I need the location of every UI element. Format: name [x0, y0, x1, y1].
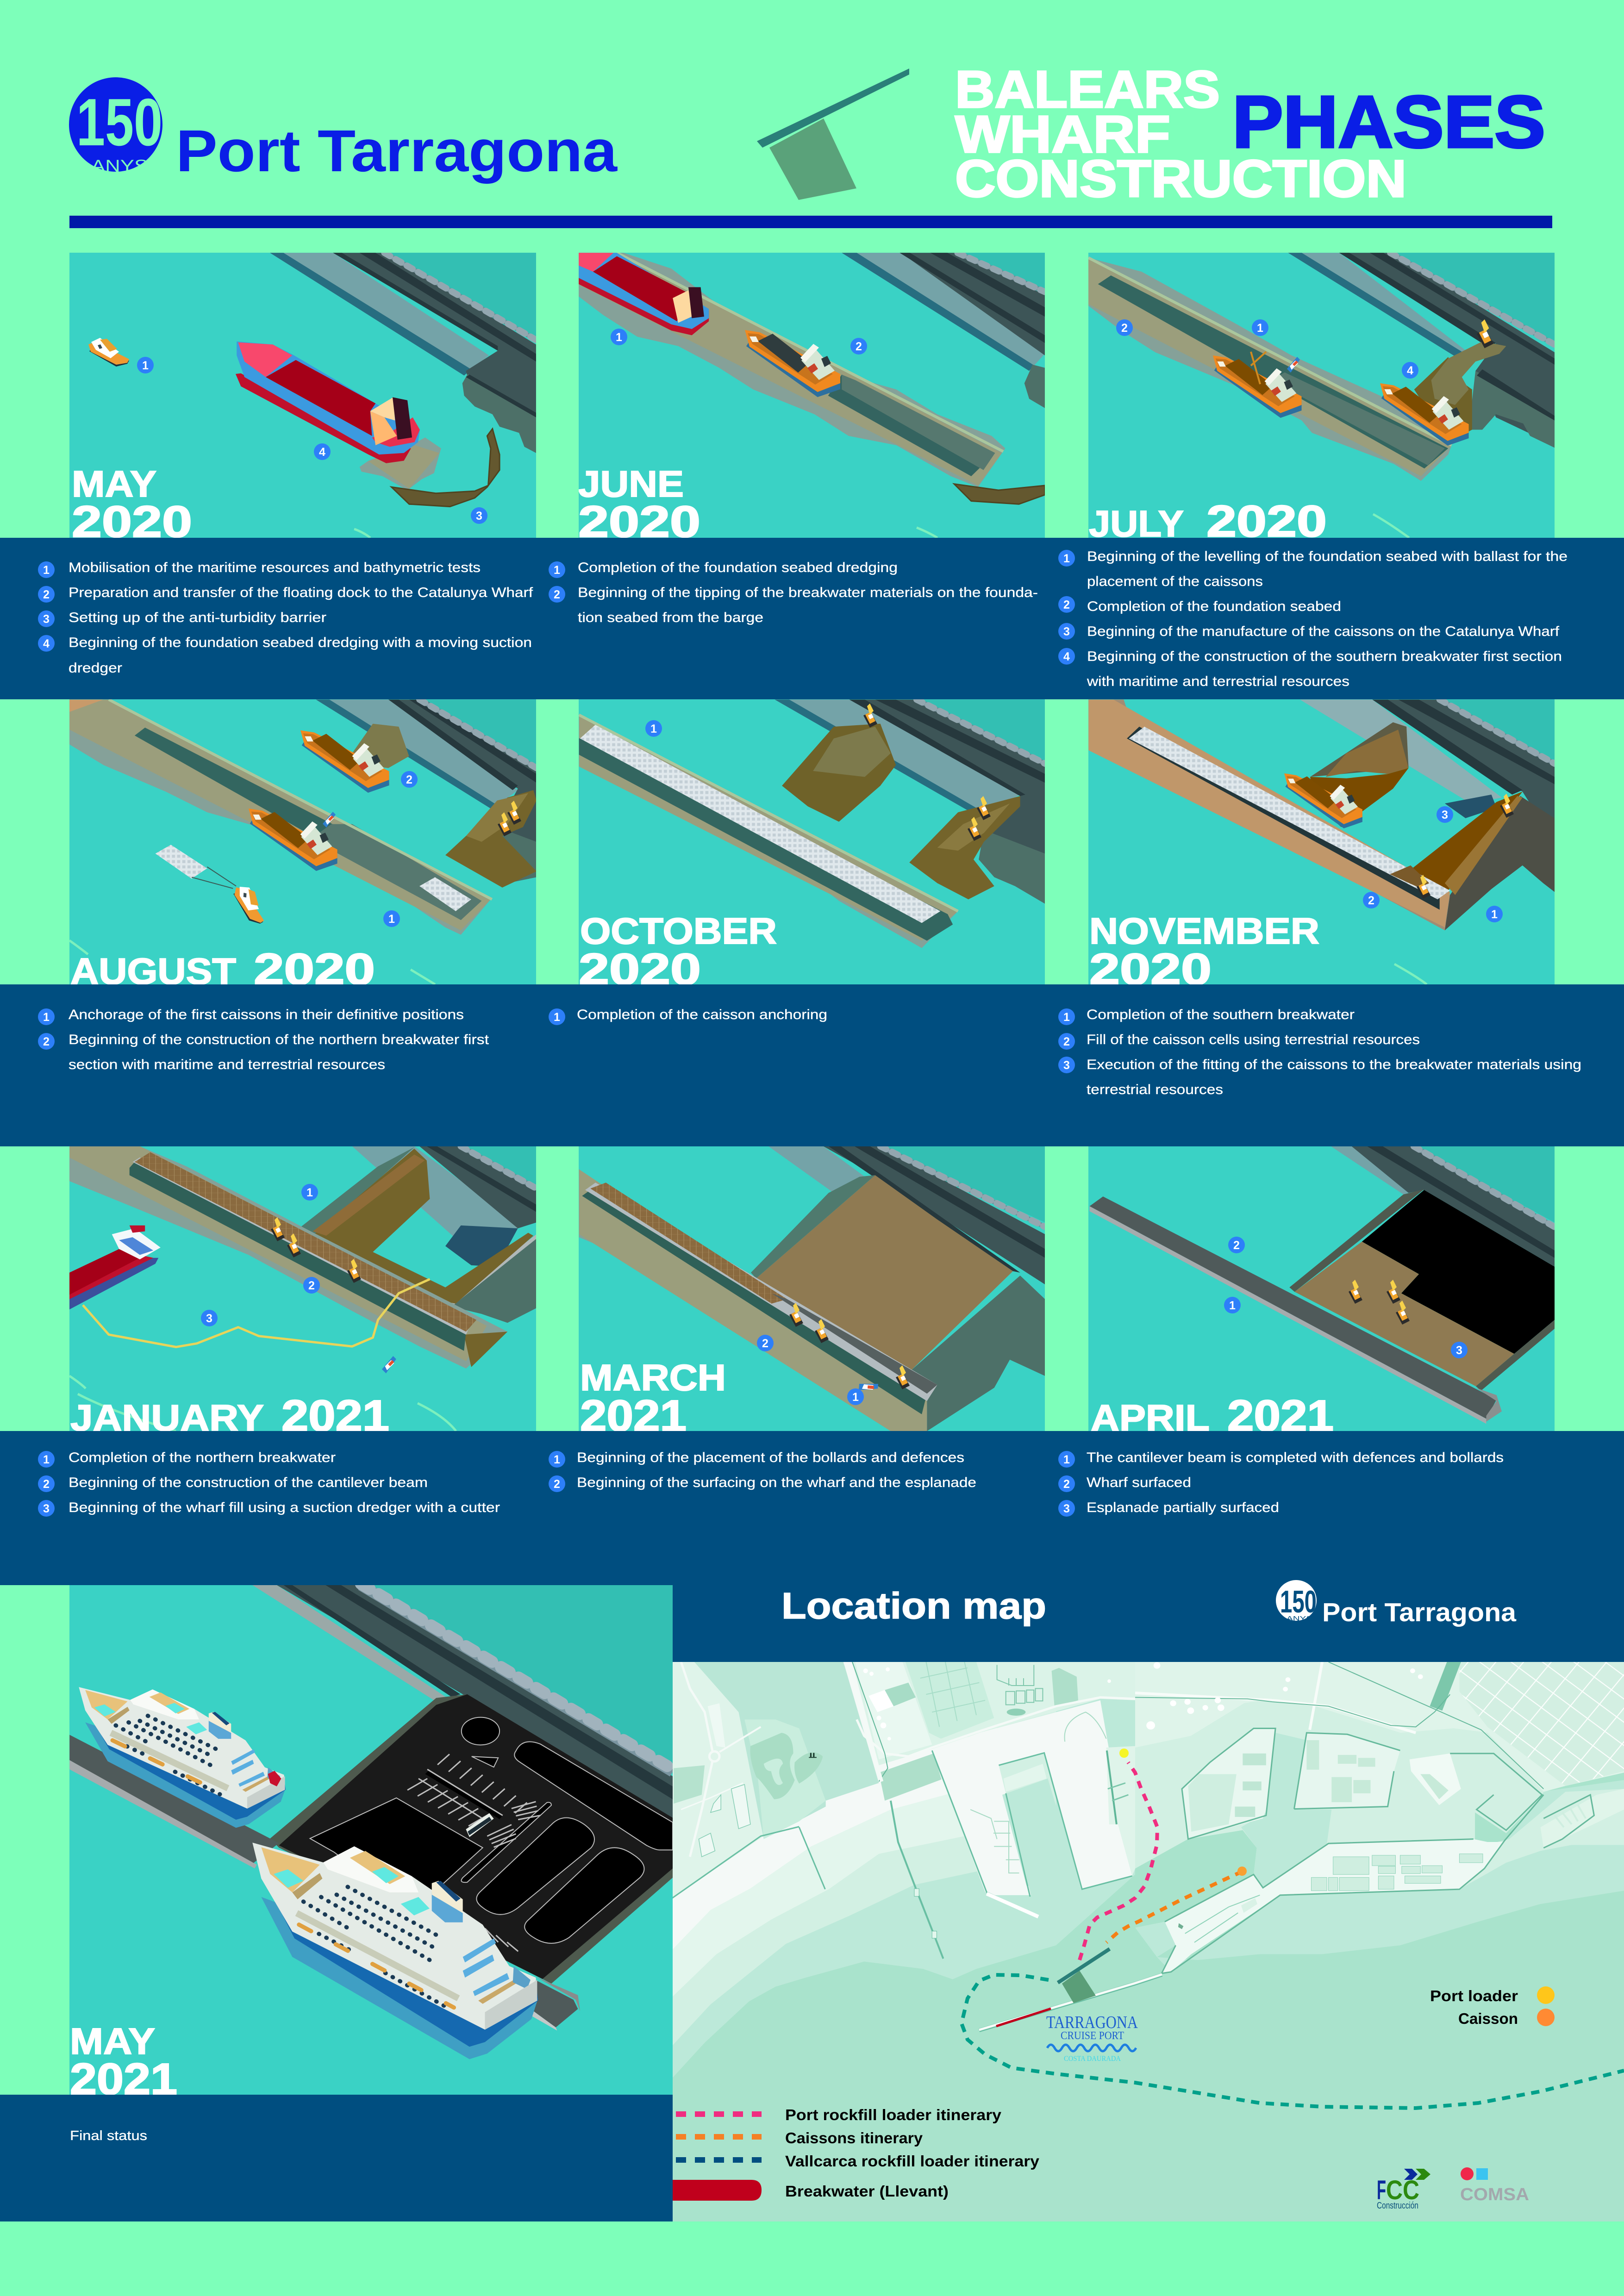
route: caissons	[1106, 1872, 1242, 1942]
marker: port loader point	[1119, 1748, 1129, 1758]
legend pink label: Port rockfill loader itinerary	[785, 2106, 1002, 2123]
June 2020 list	[549, 560, 1038, 625]
May 2020 list	[38, 560, 533, 676]
November 2020 list: Completion of the southern breakwater	[1087, 1007, 1355, 1022]
band: row 3 captions	[0, 1431, 1624, 1585]
month label: AUGUST	[70, 951, 236, 992]
legend navy label: Vallcarca rockfill loader itinerary	[785, 2153, 1040, 2170]
July 2020 list: Completion of the foundation seabed	[1087, 599, 1341, 614]
June 2020 list: 1	[554, 564, 560, 577]
month label	[73, 471, 191, 538]
logo: Tarragona Cruise Port	[1046, 2013, 1138, 2063]
October 2020 list: 1	[554, 1011, 560, 1024]
legend navy	[676, 2157, 762, 2163]
March 2021 list: Beginning of the placement of the bollards and defences	[577, 1450, 964, 1465]
logo: small 150 anys: ANYS	[1287, 1615, 1312, 1623]
excavators	[863, 703, 991, 841]
July 2020 list: 4	[1063, 650, 1070, 663]
month label: 2021	[580, 1391, 687, 1441]
seabed scene	[579, 253, 1045, 504]
foam	[917, 528, 937, 538]
badge 1	[383, 910, 400, 927]
badge 4	[1402, 362, 1418, 379]
seabed scene	[1088, 253, 1555, 481]
badge 1: 1	[852, 1391, 859, 1404]
panel: April 2021	[1088, 1146, 1555, 1441]
panel: July 2020	[1088, 253, 1555, 546]
excavator	[1477, 319, 1493, 348]
July 2020 list: Beginning of the manufacture of the caissons on the Catalunya Wharf	[1087, 624, 1560, 639]
July 2020 list: 3	[1063, 625, 1070, 638]
caisson: Caisson	[1458, 2010, 1518, 2027]
dredger ship	[579, 253, 709, 335]
legend orange	[676, 2134, 762, 2140]
badge 2: 2	[1233, 1239, 1240, 1252]
badge 2	[401, 771, 418, 788]
August 2020 list: Beginning of the construction of the northern breakwater first	[69, 1032, 489, 1047]
badge 3	[1451, 1342, 1468, 1358]
panel: June 2020	[578, 253, 1045, 547]
badge 1	[645, 720, 662, 737]
May 2020 list: Preparation and transfer of the floating dock to the Catalunya Wharf	[69, 585, 533, 600]
badge 3: 3	[1442, 809, 1448, 821]
marker: caisson point	[1237, 1867, 1247, 1876]
small boat	[856, 1375, 881, 1399]
badge 2: 2	[856, 340, 862, 353]
foam	[69, 1376, 456, 1431]
cruise ship: large	[252, 1842, 538, 2059]
badge 1: 1	[616, 331, 622, 344]
badge 1	[1486, 906, 1503, 922]
title: Balears Wharf Construction: CONSTRUCTION	[955, 149, 1406, 208]
badge 4: 4	[319, 446, 325, 459]
seabed scene	[69, 699, 537, 935]
month label: 2020	[578, 497, 700, 547]
barges	[1213, 355, 1469, 446]
badge 1	[611, 329, 627, 345]
July 2020 list: Beginning of the construction of the southern breakwater first section	[1087, 649, 1562, 664]
month label: JANUARY	[70, 1397, 264, 1438]
excavators	[1417, 794, 1514, 899]
port loader dot	[1537, 1986, 1555, 2004]
March 2021 list: 2	[554, 1478, 560, 1491]
November 2020 list: 1	[1063, 1011, 1070, 1024]
vehicles	[1349, 1280, 1410, 1325]
April 2021 list: Wharf surfaced	[1087, 1475, 1191, 1490]
month label: MAY	[72, 463, 156, 504]
badge 3: 3	[1456, 1344, 1462, 1357]
route: Vallcarca rockfill loader	[962, 1975, 1624, 2108]
title: Phases: PHASES	[1232, 81, 1545, 163]
badge 1: 1	[388, 913, 395, 926]
January 2021 list: 2	[43, 1478, 50, 1491]
month label: MARCH	[580, 1357, 726, 1398]
month label: 2020	[1089, 945, 1212, 994]
barges	[249, 730, 389, 871]
April 2021 list	[1058, 1450, 1504, 1517]
June 2020 list: 2	[554, 588, 560, 601]
month label	[580, 1357, 726, 1441]
foam	[1373, 514, 1409, 538]
November 2020 list: Fill of the caisson cells using terrestrial resources	[1087, 1032, 1420, 1047]
panel: March 2021	[579, 1146, 1045, 1441]
badge 2: 2	[406, 773, 412, 786]
April 2021 list: 1	[1063, 1453, 1070, 1466]
August 2020 list	[38, 1007, 489, 1072]
barge	[745, 330, 840, 397]
badge 1: 1	[1491, 908, 1498, 921]
crane	[1251, 352, 1266, 384]
month label	[1089, 497, 1327, 546]
November 2020 list: Execution of the fitting of the caissons to the breakwater materials using	[1087, 1057, 1581, 1072]
seabed scene	[579, 699, 1045, 948]
logo: Tarragona Cruise Port: CRUISE PORT	[1061, 2030, 1124, 2042]
July 2020 list: placement of the caissons	[1087, 574, 1263, 589]
month label: 2020	[72, 497, 192, 547]
January 2021 list: Completion of the northern breakwater	[69, 1450, 336, 1465]
logo: Tarragona Cruise Port: COSTA DAURADA	[1064, 2055, 1121, 2063]
badge 2	[850, 338, 867, 355]
badge 2: 2	[762, 1337, 768, 1350]
July 2020 list: 1	[1063, 552, 1070, 565]
month label: 2021	[1227, 1391, 1334, 1441]
title: Balears Wharf Construction: WHARF	[955, 105, 1170, 163]
small boat	[382, 1356, 396, 1373]
small boat	[1287, 357, 1300, 373]
icon: wharf plan	[757, 68, 909, 200]
badge 2	[1116, 319, 1133, 336]
badge 3: 3	[476, 510, 482, 523]
October 2020 list: Completion of the caisson anchoring	[577, 1007, 827, 1022]
cantilever beam	[69, 1735, 580, 2031]
legend breakwater label: Breakwater (Llevant)	[785, 2183, 949, 2200]
badge 2: 2	[1121, 322, 1128, 335]
July 2020 list: Beginning of the levelling of the foundation seabed with ballast for the	[1087, 549, 1568, 564]
logo: small 150 anys: 150	[1280, 1584, 1317, 1619]
caisson dot	[1537, 2009, 1555, 2026]
month label: JULY	[1089, 503, 1184, 544]
April 2021 list: 2	[1063, 1478, 1070, 1491]
panel: May 2020	[69, 253, 536, 547]
excavators	[498, 801, 521, 836]
badge 1: 1	[650, 722, 657, 735]
final status text: Final status	[70, 2128, 147, 2143]
band: final status	[0, 2095, 673, 2221]
badge 2	[1228, 1237, 1245, 1253]
esplanade scene	[1090, 1146, 1555, 1424]
May 2020 list: 3	[43, 613, 50, 626]
month label: 2021	[281, 1391, 389, 1441]
badge 3: 3	[206, 1312, 212, 1325]
legend: routes	[673, 2106, 1040, 2201]
month label	[70, 2021, 177, 2104]
May 2020 list: Beginning of the foundation seabed dredging with a moving suction	[69, 635, 532, 650]
logo: FCC Construccion: Construcción	[1377, 2201, 1418, 2211]
badge 2: 2	[1368, 894, 1374, 907]
month label	[578, 463, 700, 547]
July 2020 list: 2	[1063, 598, 1070, 611]
location map	[672, 1662, 1624, 2221]
foam	[354, 529, 370, 538]
flag	[268, 1771, 281, 1786]
January 2021 list: 3	[43, 1502, 50, 1515]
logo: FCC Construccion: F	[1377, 2175, 1386, 2205]
dredger ship	[236, 342, 420, 463]
logo: COMSA	[1460, 2167, 1529, 2204]
breakwater strip	[979, 1974, 1162, 2030]
legend breakwater	[673, 2180, 762, 2201]
badge 4: 4	[1407, 364, 1413, 377]
November 2020 list: 3	[1063, 1059, 1070, 1072]
badge 2	[1363, 892, 1380, 908]
badge 2	[757, 1335, 774, 1351]
foam	[411, 970, 435, 984]
tug	[225, 882, 275, 927]
foam	[1394, 964, 1427, 984]
badge 3	[1437, 806, 1453, 823]
month label	[70, 945, 375, 994]
August 2020 list: section with maritime and terrestrial resources	[69, 1057, 385, 1072]
location map header	[673, 1580, 1624, 1662]
May 2020 list: Setting up of the anti-turbidity barrier	[69, 610, 326, 625]
seabed scene	[579, 1146, 1045, 1431]
April 2021 list: Esplanade partially surfaced	[1087, 1500, 1279, 1515]
logo: Tarragona Cruise Port: TARRAGONA	[1046, 2013, 1138, 2032]
November 2020 list: terrestrial resources	[1087, 1082, 1223, 1097]
badge 1	[137, 357, 154, 373]
badge 1: 1	[1257, 322, 1263, 335]
June 2020 list: Beginning of the tipping of the breakwater materials on the founda-	[578, 585, 1038, 600]
logo: COMSA: COMSA	[1460, 2185, 1529, 2204]
turbidity pipe	[83, 1279, 430, 1347]
badge 1: 1	[306, 1186, 313, 1199]
header brand: Port Tarragona: Port Tarragona	[176, 118, 618, 184]
cargo ship	[69, 1226, 161, 1309]
tug	[88, 338, 129, 367]
legend pink	[676, 2111, 762, 2117]
August 2020 list: Anchorage of the first caissons in their definitive positions	[69, 1007, 464, 1022]
October 2020 list	[549, 1007, 827, 1025]
seabed scene	[270, 253, 536, 507]
legend: points	[1430, 1986, 1555, 2027]
legend orange label: Caissons itinerary	[785, 2129, 923, 2147]
January 2021 list: Beginning of the wharf fill using a suction dredger with a cutter	[69, 1500, 500, 1515]
June 2020 list: tion seabed from the barge	[578, 610, 763, 625]
March 2021 list: 1	[554, 1453, 560, 1466]
August 2020 list: 2	[43, 1035, 50, 1048]
seabed scene	[69, 1146, 537, 1369]
badge 1	[301, 1184, 318, 1201]
vehicles	[789, 1303, 910, 1389]
month label: APRIL	[1091, 1397, 1210, 1438]
title: Balears Wharf Construction: BALEARS	[955, 60, 1220, 118]
panel: January 2021	[69, 1146, 537, 1441]
panel: August 2020	[69, 699, 537, 994]
east sector	[1135, 1662, 1624, 1973]
vehicles	[271, 1217, 361, 1283]
badge 2	[303, 1277, 320, 1294]
logo: FCC Construccion: CC	[1386, 2175, 1419, 2205]
bus	[466, 1813, 494, 1837]
panel: October 2020	[579, 699, 1045, 994]
May 2020 list: 1	[43, 564, 50, 577]
May 2020 list: 4	[43, 637, 50, 650]
June 2020 list: Completion of the foundation seabed dredging	[578, 560, 898, 575]
seabed scene	[1088, 699, 1555, 930]
month label	[1091, 1391, 1334, 1441]
logo: FCC Construccion	[1377, 2169, 1430, 2211]
badge 1	[1224, 1297, 1241, 1313]
month label: 2020	[579, 945, 701, 994]
March 2021 list: Beginning of the surfacing on the wharf and the esplanade	[577, 1475, 976, 1490]
month label: 2021	[70, 2054, 177, 2104]
month label	[579, 910, 777, 994]
small boat	[323, 812, 336, 828]
port loader: Port loader	[1430, 1987, 1518, 2004]
March 2021 list	[549, 1450, 976, 1492]
logo: small 150 anys	[1276, 1580, 1317, 1623]
outer breakwater	[252, 1584, 673, 1823]
month label: JUNE	[578, 463, 684, 504]
July 2020 list: with maritime and terrestrial resources	[1087, 674, 1349, 689]
header logo: 150 anys: 150	[76, 85, 162, 160]
month label	[70, 1391, 389, 1441]
esplanade	[270, 1694, 673, 1984]
April 2021 list: The cantilever beam is completed with defences and bollards	[1087, 1450, 1504, 1465]
badge 1: 1	[142, 359, 149, 372]
route: port rockfill loader	[1080, 1762, 1157, 1960]
header logo: 150 anys: ANYS	[91, 156, 148, 175]
barge	[1284, 773, 1362, 828]
badge 1	[1252, 319, 1268, 336]
badge 2: 2	[308, 1279, 315, 1292]
month label: 2020	[254, 945, 375, 994]
foam	[69, 940, 88, 954]
November 2020 list	[1058, 1007, 1581, 1097]
January 2021 list	[38, 1450, 500, 1517]
cruise ship: small	[79, 1687, 286, 1828]
November 2020 list: 2	[1063, 1035, 1070, 1048]
badge 3	[471, 507, 487, 524]
badge 3	[201, 1310, 218, 1326]
May 2020 list: dredger	[69, 660, 122, 676]
month label: OCTOBER	[580, 910, 777, 952]
brand: Port Tarragona	[1322, 1598, 1517, 1627]
panel: May 2021 final status	[69, 1584, 673, 2104]
May 2020 list: 2	[43, 588, 50, 601]
panel: November 2020	[1088, 699, 1555, 994]
month label: 2020	[1206, 497, 1327, 546]
month label: MAY	[70, 2021, 155, 2062]
wharf plot	[1058, 1949, 1110, 2003]
west sector	[672, 1662, 1135, 2078]
January 2021 list: 1	[43, 1453, 50, 1466]
badge 1	[847, 1388, 864, 1405]
July 2020 list	[1058, 549, 1568, 689]
August 2020 list: 1	[43, 1011, 50, 1024]
title: Balears Wharf Construction	[955, 60, 1406, 208]
badge 1: 1	[1229, 1299, 1236, 1312]
April 2021 list: 3	[1063, 1502, 1070, 1515]
May 2020 list: Mobilisation of the maritime resources and bathymetric tests	[69, 560, 481, 575]
month label	[1089, 910, 1319, 994]
header logo: 150 anys	[69, 77, 162, 175]
January 2021 list: Beginning of the construction of the cantilever beam	[69, 1475, 428, 1490]
month label: NOVEMBER	[1089, 910, 1319, 952]
heading: Location map	[781, 1585, 1046, 1626]
badge 4	[314, 443, 331, 460]
band: row 1 captions	[0, 538, 1624, 699]
band: row 2 captions	[0, 984, 1624, 1146]
